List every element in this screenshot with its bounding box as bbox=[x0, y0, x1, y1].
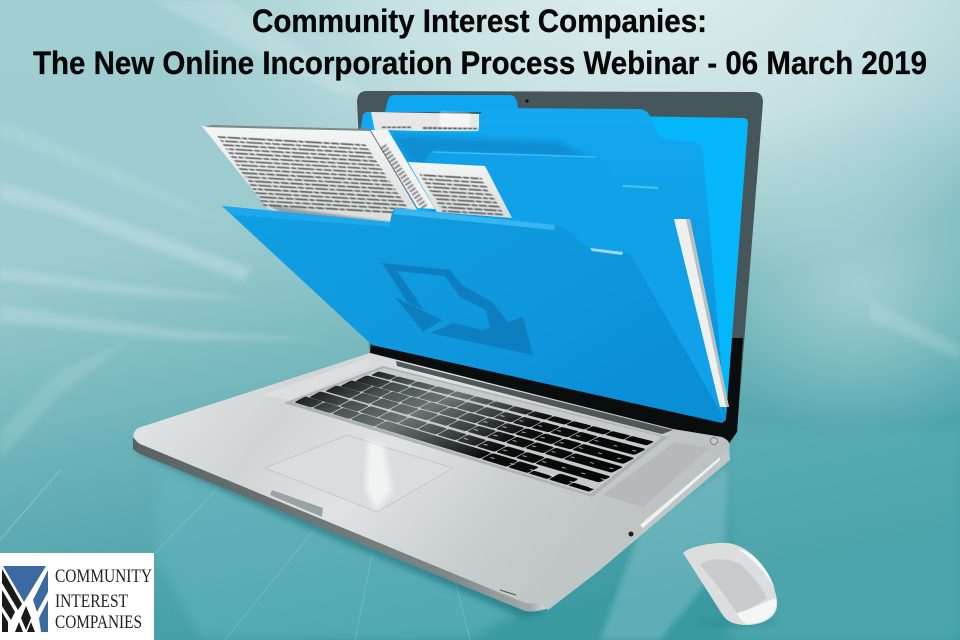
top folder tab bbox=[385, 95, 519, 112]
webcam bbox=[525, 99, 529, 103]
laptop lid bbox=[357, 91, 763, 445]
headphone jack bbox=[628, 532, 634, 536]
title: Community Interest Companies: bbox=[252, 3, 707, 39]
third document sheet bbox=[408, 162, 512, 218]
hinge strip bbox=[396, 361, 673, 434]
key row 3 bbox=[325, 385, 625, 473]
front notch bbox=[270, 490, 323, 517]
folder emblem bbox=[382, 263, 533, 355]
mouse body bbox=[683, 543, 777, 625]
front edge bbox=[133, 438, 548, 612]
keyboard keys bbox=[294, 371, 654, 492]
logo text: INTEREST bbox=[55, 591, 128, 612]
laptop bbox=[133, 91, 763, 618]
title bbox=[33, 3, 927, 81]
side slot bbox=[640, 457, 720, 528]
status light bbox=[500, 590, 516, 595]
front folder bbox=[222, 206, 724, 423]
logo panel bbox=[0, 553, 154, 640]
screen bbox=[363, 112, 748, 418]
folder shadow bbox=[392, 135, 590, 170]
computer mouse bbox=[683, 543, 778, 628]
key row 6 bbox=[371, 371, 654, 445]
key row 5 bbox=[355, 375, 648, 456]
middle document strip bbox=[370, 130, 435, 209]
logo text: COMMUNITY bbox=[55, 566, 152, 587]
laptop shadow bbox=[136, 440, 545, 618]
left document sheet bbox=[202, 125, 420, 232]
second folder bbox=[388, 108, 726, 423]
logo text bbox=[55, 566, 152, 633]
logo text: COMPANIES bbox=[55, 612, 142, 633]
power button bbox=[710, 438, 718, 444]
mouse inner panel bbox=[700, 559, 767, 613]
right speaker bbox=[602, 442, 710, 507]
keyboard well bbox=[284, 366, 668, 497]
third folder bbox=[425, 152, 724, 423]
rear paper bbox=[371, 112, 479, 131]
key row 1 bbox=[294, 396, 601, 492]
rear folder bbox=[360, 112, 388, 132]
white page edge bbox=[674, 219, 729, 407]
key row 4 bbox=[340, 380, 637, 464]
laptop base bbox=[133, 353, 730, 612]
right edge bbox=[535, 448, 730, 610]
key row 2 bbox=[309, 391, 613, 483]
trackpad bbox=[265, 435, 453, 512]
folder stack bbox=[202, 95, 729, 423]
top surface bbox=[133, 353, 730, 603]
mouse highlight bbox=[738, 549, 775, 590]
logo mark bbox=[2, 566, 48, 632]
